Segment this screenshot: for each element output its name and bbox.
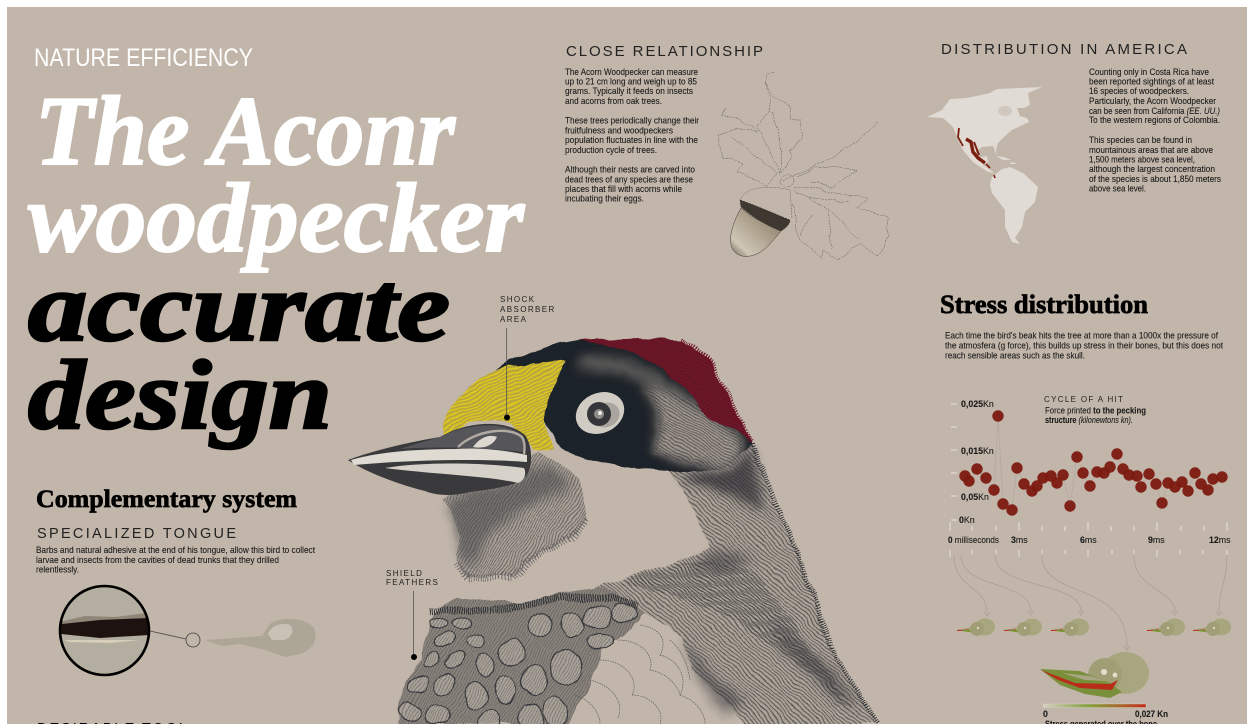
text block: acorn woodpecker facts bbox=[565, 67, 699, 204]
text block: tongue: Barbs and natural adhesive at the end of his tongue, allow this bird to collect bbox=[36, 545, 316, 555]
red crown patch bbox=[580, 338, 752, 443]
text block: tongue bbox=[36, 545, 316, 574]
text block: acorn woodpecker facts: Although their nests are carved into bbox=[565, 164, 695, 174]
shield feathers bbox=[397, 587, 647, 724]
illustration: magnified tongue bbox=[60, 586, 149, 675]
skull eye marks bbox=[268, 624, 292, 640]
heading: close relationship: CLOSE RELATIONSHIP bbox=[566, 43, 763, 60]
panel: complementary system bbox=[36, 486, 316, 724]
x axis: 9ms bbox=[1148, 535, 1165, 545]
main title: The Aconr bbox=[35, 77, 456, 186]
text block: acorn woodpecker facts: production cycle of trees. bbox=[565, 145, 657, 155]
neck and body plumage bbox=[600, 443, 878, 724]
chart title: CYCLE OF A HIT bbox=[1044, 395, 1124, 404]
yellow shock absorber area bbox=[442, 360, 567, 451]
text block: tongue: relentlessly. bbox=[36, 564, 79, 574]
chart subtitle: structure (kilonewtons kn). bbox=[1045, 415, 1133, 425]
eye bbox=[569, 384, 631, 442]
text block: distribution: To the western regions of Colombia. bbox=[1089, 115, 1220, 125]
y axis: 0,025Kn bbox=[961, 399, 994, 409]
panel: close relationship bbox=[565, 43, 888, 260]
stress legend bbox=[1043, 704, 1168, 724]
data points bbox=[959, 410, 1228, 516]
label: shield feathers: SHIELD bbox=[386, 569, 423, 578]
stress legend: 0,027 Kn bbox=[1135, 709, 1168, 719]
head dark plumage bbox=[497, 340, 752, 472]
connecting line bbox=[965, 416, 1222, 510]
stress legend: 0 bbox=[1043, 709, 1048, 719]
beak bbox=[348, 424, 531, 495]
text block: distribution: above sea level. bbox=[1089, 184, 1146, 194]
text block: distribution: Counting only in Costa Rica have bbox=[1089, 67, 1209, 77]
y axis bbox=[951, 399, 994, 525]
throat beard feathers bbox=[440, 452, 585, 578]
text block: acorn woodpecker facts: grams. Typically it feeds on insects bbox=[565, 86, 694, 96]
x axis: 0 milliseconds bbox=[948, 535, 1000, 545]
text block: distribution: 1,500 meters above sea level, bbox=[1089, 154, 1195, 164]
y axis: 0,05Kn bbox=[961, 492, 989, 502]
text block: distribution: can be seen from California (EE. UU.) bbox=[1089, 106, 1220, 116]
main title: accurate bbox=[28, 253, 450, 362]
text block: distribution: been reported sightings of at least bbox=[1089, 76, 1215, 86]
label: shock absorber area: AREA bbox=[500, 315, 527, 324]
text block: acorn woodpecker facts: places that fill with acorns while bbox=[565, 184, 682, 194]
text block: stress: Each time the bird's beak hits the tree at more than a 1000x the pressure of bbox=[945, 330, 1219, 340]
text block: stress bbox=[945, 330, 1224, 360]
outlined lower breast feathers bbox=[575, 625, 705, 724]
chart subtitle: Force printed to the pecking bbox=[1045, 406, 1146, 416]
text block: tongue: larvae and insects from the cavities of dead trunks that they drilled bbox=[36, 555, 279, 565]
y axis: 0,015Kn bbox=[961, 446, 994, 456]
illustration: woodpecker bbox=[348, 295, 878, 724]
y axis: 0Kn bbox=[959, 515, 975, 525]
subheading: specialized tongue: SPECIALIZED TONGUE bbox=[37, 526, 236, 542]
label: shock absorber area: ABSORBER bbox=[500, 305, 556, 314]
panel: distribution in america bbox=[927, 41, 1222, 244]
skull stress sequence bbox=[957, 618, 1231, 636]
text block: acorn woodpecker facts: The Acorn Woodpecker can measure bbox=[565, 67, 698, 77]
label: shock absorber area bbox=[500, 295, 556, 420]
text block: distribution: 16 species of woodpeckers. bbox=[1089, 86, 1189, 96]
text block: distribution bbox=[1089, 67, 1222, 194]
x axis: 12ms bbox=[1209, 535, 1231, 545]
eyebrow: nature efficiency: NATURE EFFICIENCY bbox=[34, 44, 253, 72]
panel: stress distribution bbox=[940, 290, 1231, 724]
text block: distribution: This species can be found in bbox=[1089, 135, 1192, 145]
text block: acorn woodpecker facts: dead trees of any species are these bbox=[565, 174, 693, 184]
large skull with stress map bbox=[1040, 652, 1149, 698]
text block: distribution: Particularly, the Acorn Woodpecker bbox=[1089, 96, 1216, 106]
text block: acorn woodpecker facts: and acorns from oak trees. bbox=[565, 96, 662, 106]
label: shock absorber area: SHOCK bbox=[500, 295, 535, 304]
heading: distribution in america: DISTRIBUTION IN AMERICA bbox=[941, 41, 1187, 58]
acorn nut bbox=[731, 208, 782, 256]
x axis bbox=[948, 522, 1231, 557]
text block: acorn woodpecker facts: fruitfulness and woodpeckers bbox=[565, 126, 674, 136]
text block: stress: reach sensible areas such as the skull. bbox=[945, 350, 1085, 360]
x axis: 3ms bbox=[1011, 535, 1028, 545]
heading: stress distribution: Stress distribution bbox=[940, 290, 1149, 319]
text block: acorn woodpecker facts: up to 21 cm long and weigh up to 85 bbox=[565, 76, 697, 86]
illustration: oak leaves and acorn bbox=[717, 72, 888, 260]
text block: stress: the atmosfera (g force), this builds up stress in their bones, but this does not bbox=[945, 340, 1224, 350]
acorn cap bbox=[740, 200, 790, 231]
text block: distribution: mountainous areas that are above bbox=[1089, 145, 1213, 155]
x axis: 6ms bbox=[1080, 535, 1097, 545]
focus circle bbox=[186, 633, 200, 647]
pointer line bbox=[150, 631, 186, 639]
main title bbox=[28, 77, 526, 450]
text block: distribution: of the species is about 1,850 meters bbox=[1089, 174, 1222, 184]
skull silhouette bbox=[205, 619, 316, 657]
chart subtitle bbox=[1045, 406, 1146, 425]
text block: acorn woodpecker facts: population fluctuates in line with the bbox=[565, 135, 698, 145]
arrows: time points to skulls bbox=[954, 555, 1227, 650]
label: shield feathers bbox=[386, 569, 439, 660]
map: americas with species range bbox=[927, 87, 1042, 244]
label: shield feathers: FEATHERS bbox=[386, 578, 439, 587]
chart: cycle of a hit bbox=[948, 395, 1231, 557]
text block: acorn woodpecker facts: incubating their eggs. bbox=[565, 194, 644, 204]
main title: woodpecker bbox=[28, 164, 526, 273]
text block: distribution: although the largest concentration bbox=[1089, 164, 1215, 174]
heading: complementary system: Complementary system bbox=[36, 486, 297, 513]
text block: acorn woodpecker facts: These trees periodically change their bbox=[565, 116, 699, 126]
main title: design bbox=[28, 341, 332, 450]
